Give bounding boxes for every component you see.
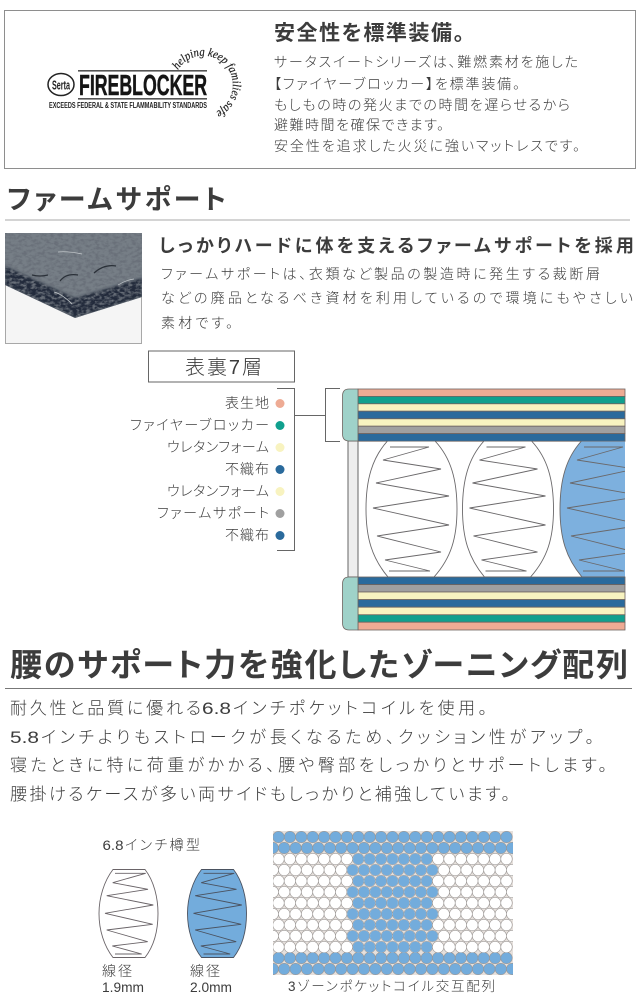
legend: layers: 不織布 — [225, 527, 269, 543]
label: coil type: インチ樽型 — [125, 837, 200, 853]
label: wire 1.9mm: 1.9mm — [102, 979, 144, 995]
text block: zoning description: 5.8 — [10, 728, 39, 747]
legend: layers: 表生地 — [225, 395, 269, 411]
legend: layers — [130, 395, 284, 543]
caption: 3 zone: 3ゾーンポケットコイル交互配列 — [288, 979, 495, 994]
label: wire 2.0mm — [190, 963, 232, 995]
text block: firm support description: ファームサポートは、衣類など製品の製造時に発生する裁断屑 — [161, 266, 600, 282]
text block: safety description: 避難時間を確保できます。 — [274, 117, 444, 133]
logo: Serta Fireblocker: Serta — [52, 78, 70, 92]
text block: safety description: 安全性を追求した火災に強いマットレスです。 — [274, 138, 580, 154]
legend: layers: ファイヤーブロッカー — [130, 417, 269, 433]
legend: layers: ウレタンフォーム — [167, 483, 269, 499]
diagram: mattress cross-section — [342, 389, 640, 630]
icon: coil 2.0mm — [188, 870, 246, 958]
legend: layers: 不織布 — [225, 461, 269, 477]
label box: 7 layers — [148, 351, 294, 382]
logo: Serta Fireblocker: FIREBLOCKER — [79, 70, 207, 102]
label box: 7 layers: 表裏7層 — [185, 356, 262, 379]
label: wire 1.9mm: 線径 — [102, 963, 132, 979]
text block: zoning description: 寝たときに特に荷重がかかる、腰や臀部をしっかりとサポートします。 — [10, 756, 607, 775]
text block: zoning description: インチよりもストロークが長くなるため、クッション性がアップ。 — [41, 728, 594, 747]
bracket connector — [277, 388, 340, 550]
label: coil type: 6.8 — [102, 837, 124, 853]
text block: zoning description: 耐久性と品質に優れる — [10, 699, 201, 718]
coils — [366, 441, 640, 577]
text block: safety description — [274, 54, 580, 154]
label: wire 2.0mm: 線径 — [190, 963, 220, 979]
text block: zoning description: 腰掛けるケースが多い両サイドもしっかりと補強しています。 — [10, 785, 510, 804]
text block: zoning description: 6.8 — [202, 699, 231, 718]
text block: safety description: サータスイートシリーズは、難燃素材を施した — [274, 54, 578, 70]
panel: fire safety — [4, 10, 636, 169]
side pillar — [348, 441, 358, 577]
legend: layers: ファームサポート — [157, 505, 269, 521]
heading: zoning: 腰のサポート力を強化したゾーニング配列 — [10, 647, 628, 683]
text block: zoning description — [10, 699, 607, 804]
logo: Serta Fireblocker: EXCEEDS FEDERAL & STATE FLAMMABILITY STANDARDS — [49, 101, 207, 110]
chart: 3 zone pocket coil layout — [273, 831, 518, 975]
text block: safety description: もしもの時の発火までの時間を遅らせるから — [274, 97, 570, 113]
label: wire 2.0mm: 2.0mm — [190, 979, 232, 995]
logo: Serta Fireblocker: helping keep families safe — [172, 48, 242, 118]
text block: firm support description: 素材です。 — [161, 315, 233, 331]
text block: firm support description: などの廃品となるべき資材を利用しているので環境にもやさしい — [161, 290, 633, 306]
heading: firm support: ファームサポート — [7, 185, 226, 215]
legend: layers: ウレタンフォーム — [167, 439, 269, 455]
text block: firm support description — [161, 266, 633, 331]
subheading: firm support: しっかりハードに体を支えるファームサポートを採用 — [159, 235, 634, 256]
top layers — [342, 389, 625, 441]
logo: Serta Fireblocker — [47, 48, 242, 118]
text block: zoning description: インチポケットコイルを使用。 — [233, 699, 487, 718]
photo: felt sample — [5, 233, 142, 344]
heading: safety: 安全性を標準装備。 — [274, 22, 464, 45]
icon: coil 1.9mm — [99, 870, 158, 958]
text block: safety description: 【ファイヤーブロッカー】を標準装備。 — [274, 76, 520, 92]
label: wire 1.9mm — [102, 963, 144, 995]
bottom layers — [342, 577, 625, 630]
